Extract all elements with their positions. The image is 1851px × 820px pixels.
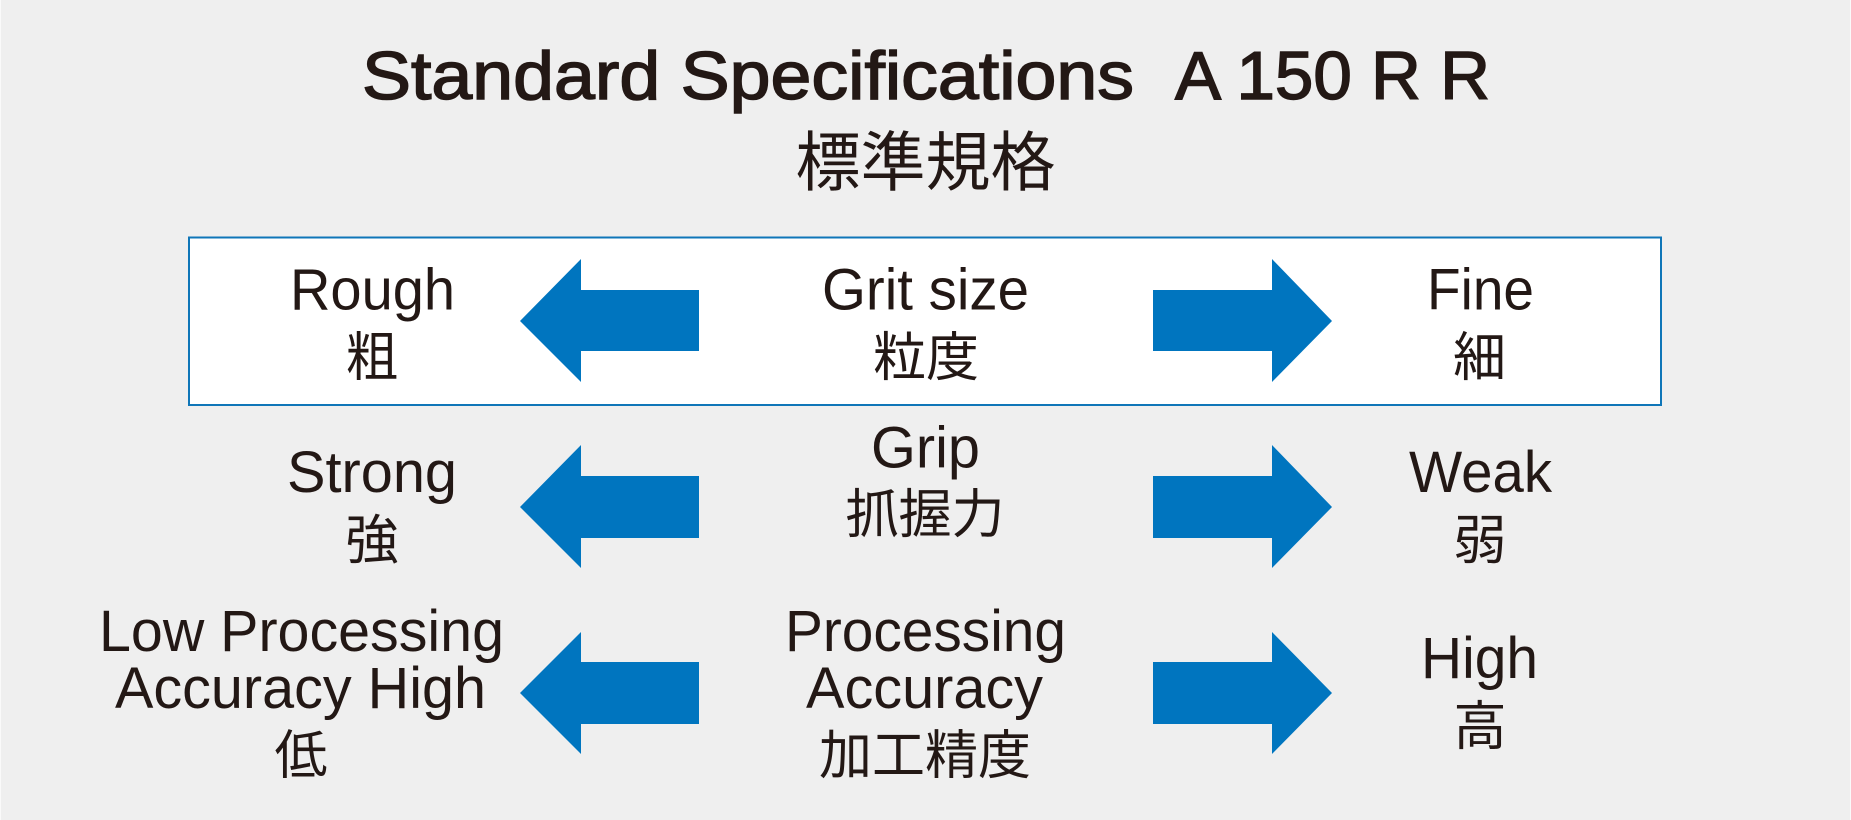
label: processing accuracy: [785, 599, 1066, 786]
title: Standard Specifications: [362, 38, 1134, 114]
label: rough: 粗: [346, 328, 398, 388]
label: strong: [287, 440, 457, 570]
label: fine: [1427, 258, 1534, 388]
arrow: grip right: [1153, 445, 1332, 568]
label: low processing accuracy high: 低: [274, 726, 328, 786]
label: fine: Fine: [1427, 258, 1534, 322]
label: rough: [290, 258, 455, 388]
arrow: grip left: [520, 445, 699, 568]
label: high: [1421, 626, 1538, 756]
arrow: processing accuracy right: [1153, 632, 1332, 754]
label: processing accuracy: Accuracy: [806, 656, 1043, 721]
label: high: High: [1421, 626, 1538, 691]
label: high: 高: [1454, 698, 1506, 756]
arrow: grit size left: [520, 259, 699, 382]
label: low processing accuracy high: Low Processing: [99, 599, 504, 664]
label: weak: 弱: [1454, 512, 1506, 570]
arrow: grit size right: [1153, 259, 1332, 382]
label: grit size: Grit size: [822, 258, 1029, 322]
label: grit size: 粒度: [873, 328, 979, 388]
subtitle: 標準規格: [795, 126, 1056, 199]
label: strong: 強: [346, 512, 398, 570]
label: processing accuracy: 加工精度: [819, 726, 1031, 786]
title: A 150 R R: [1175, 38, 1490, 114]
label: grip: [846, 416, 1004, 544]
label: weak: Weak: [1409, 440, 1553, 505]
panel: grit size row box: [189, 238, 1661, 405]
label: processing accuracy: Processing: [785, 599, 1066, 664]
label: grip: Grip: [871, 416, 980, 480]
title: [362, 38, 1490, 114]
label: low processing accuracy high: Accuracy High: [115, 656, 486, 721]
label: weak: [1409, 440, 1553, 570]
arrow: processing accuracy left: [520, 632, 699, 754]
label: grit size: [822, 258, 1029, 388]
label: rough: Rough: [290, 258, 455, 322]
label: strong: Strong: [287, 440, 457, 505]
label: low processing accuracy high: [99, 599, 504, 786]
label: fine: 細: [1453, 328, 1506, 388]
label: grip: 抓握力: [846, 486, 1004, 544]
